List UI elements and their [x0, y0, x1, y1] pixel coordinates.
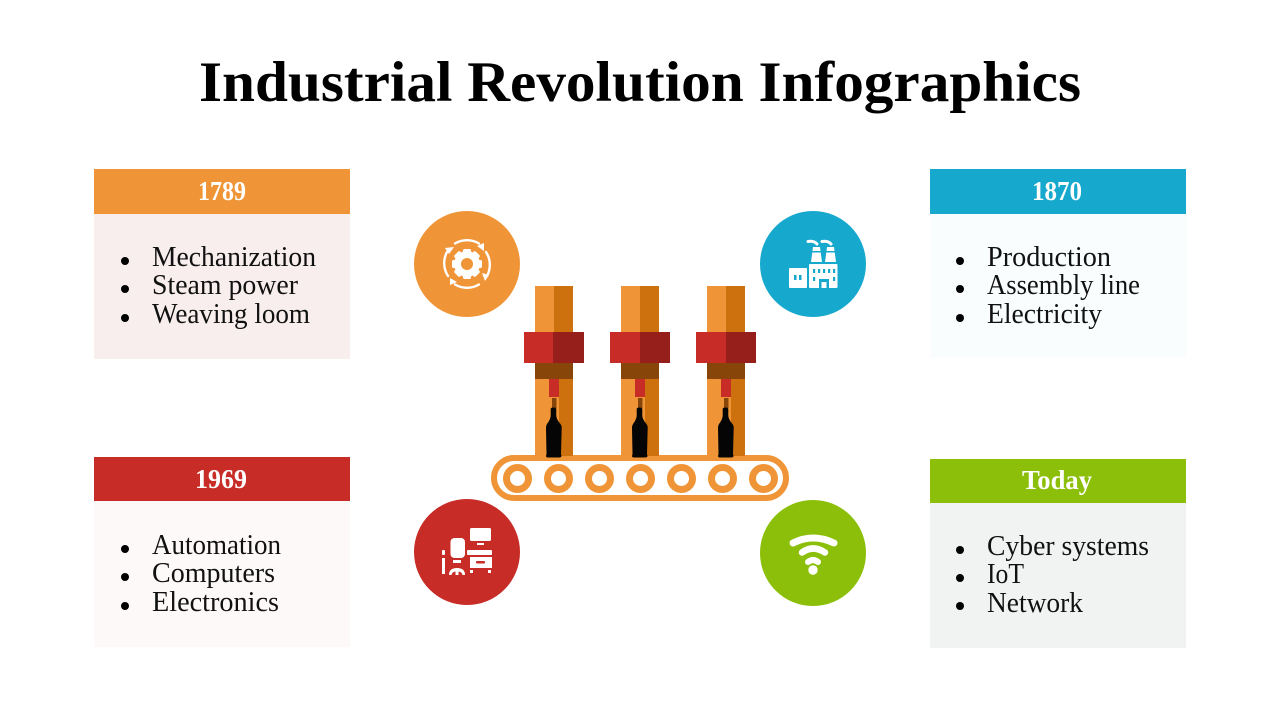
list: Today items: Network [987, 588, 1083, 619]
list: Today items [956, 531, 1149, 619]
conveyor belt [494, 458, 786, 498]
panel: 1789 [94, 169, 350, 359]
list: 1870 items: Electricity [987, 299, 1102, 330]
heading: 1969: 1969 [195, 464, 247, 494]
list: 1870 items [956, 242, 1140, 330]
list: 1789 items: Steam power [152, 270, 299, 301]
heading: 1789: 1789 [198, 176, 246, 206]
icon: gear with rotating arrows [414, 211, 520, 317]
title: Industrial Revolution Infographics [199, 51, 1081, 114]
machine unit 2 [610, 286, 670, 458]
panel: 1969 [94, 457, 350, 647]
list: 1969 items: Electronics [152, 587, 279, 618]
list: 1870 items: Assembly line [987, 270, 1140, 301]
list: Today items: IoT [987, 559, 1024, 590]
list: 1969 items: Computers [152, 558, 275, 589]
heading: 1870: 1870 [1032, 176, 1082, 206]
list: 1969 items: Automation [152, 530, 281, 561]
list: 1789 items: Weaving loom [152, 299, 310, 330]
machine unit 1 [524, 286, 584, 458]
machine unit 3 [696, 286, 756, 458]
panel: Today [930, 459, 1186, 648]
conveyor machine illustration [494, 286, 786, 498]
heading: Today: Today [1022, 465, 1092, 495]
icon: computer desk and chair [414, 499, 520, 605]
list: Today items: Cyber systems [987, 531, 1149, 562]
icon: factory [760, 211, 866, 317]
list: 1969 items [121, 530, 281, 618]
list: 1789 items [121, 242, 316, 330]
panel: 1870 [930, 169, 1186, 358]
list: 1789 items: Mechanization [152, 242, 316, 273]
list: 1870 items: Production [987, 242, 1111, 273]
icon: wifi [760, 500, 866, 606]
